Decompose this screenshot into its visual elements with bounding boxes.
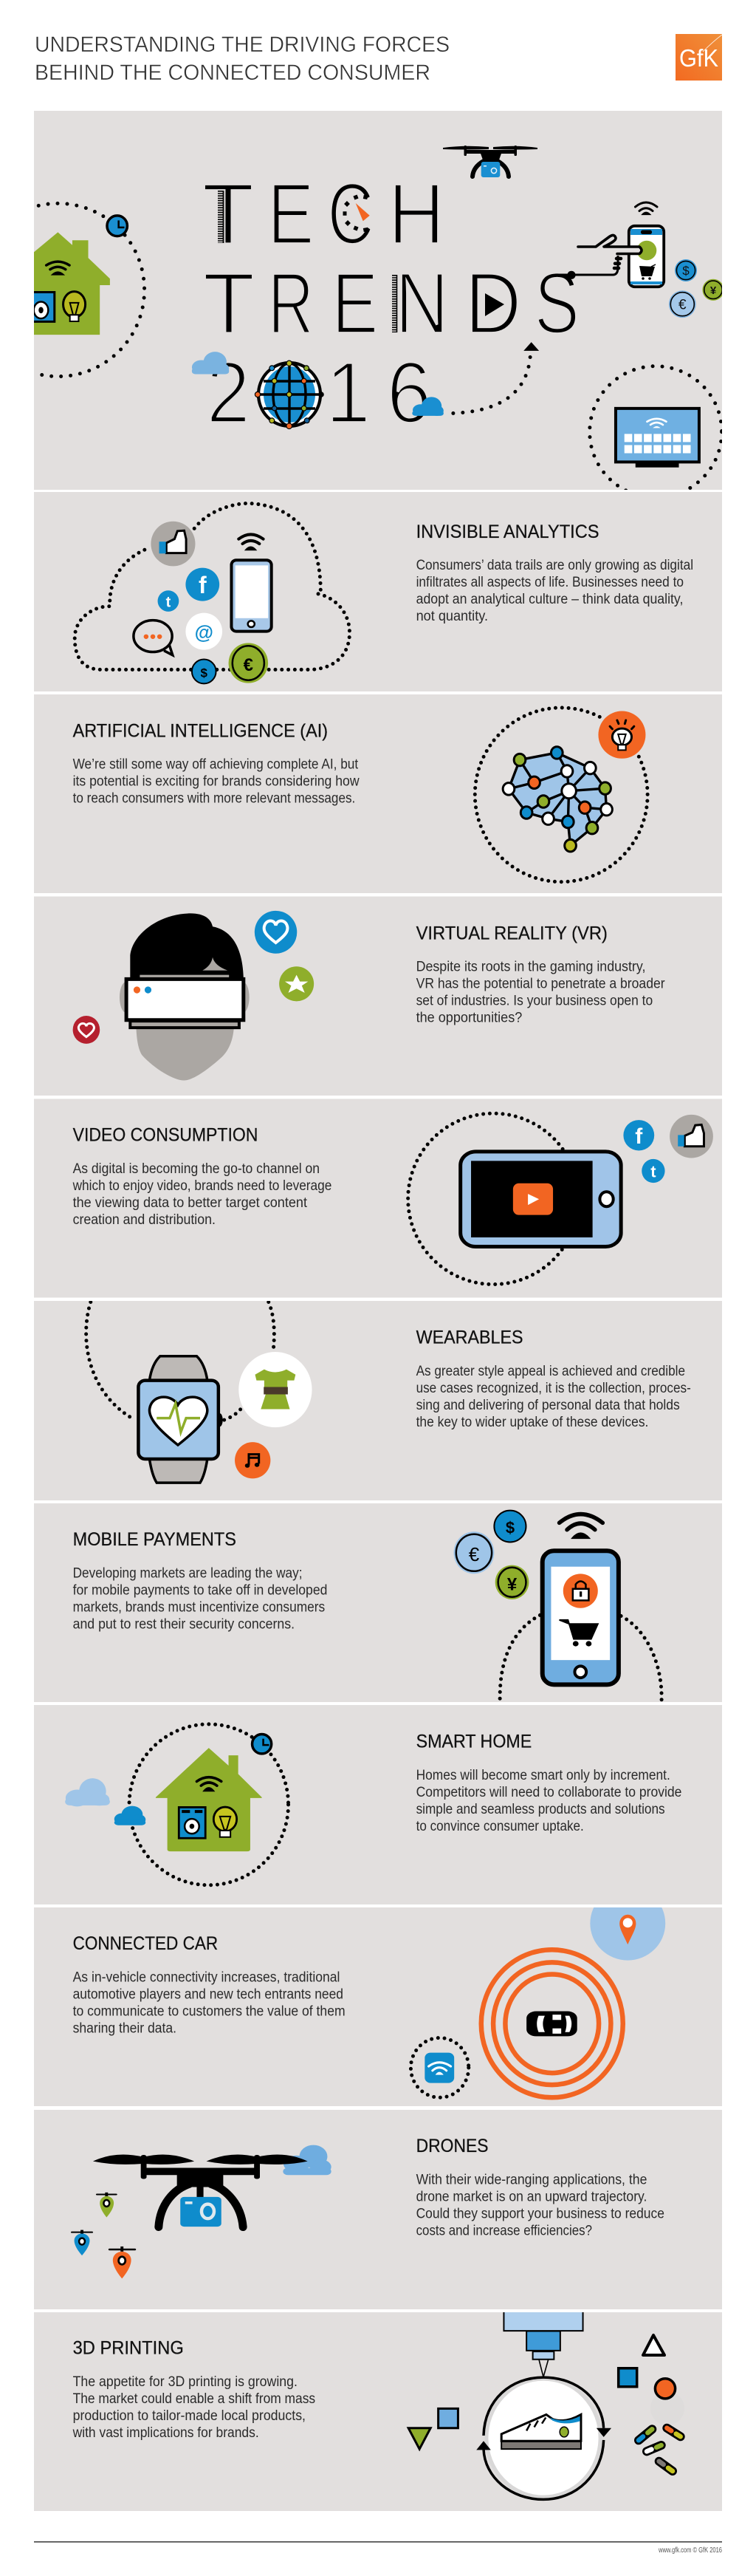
dotted orbit (475, 708, 647, 882)
icon: dollar coin: $ (682, 264, 690, 278)
icon: tumblr: t (650, 1163, 656, 1181)
icon: smart home (29, 232, 110, 335)
logo: GfK (676, 34, 722, 81)
icon: tumblr (158, 590, 179, 612)
body text: set of industries. Is your business open to (416, 993, 653, 1008)
icon: dial in C (343, 195, 370, 232)
icon: green house (156, 1748, 262, 1851)
illustration: 3D printer (408, 2309, 684, 2499)
heading: SMART HOME (416, 1732, 532, 1752)
icon: shopping cart (560, 1620, 598, 1647)
icon: facebook: f (199, 572, 207, 598)
icon: blue square (619, 2368, 637, 2387)
panel: 3D printing (34, 2309, 722, 2511)
icon: at sign: @ (195, 621, 213, 643)
icon: sneaker (501, 2414, 581, 2449)
logo: GfK: GfK (679, 44, 718, 72)
body text: We’re still some way off achieving complete AI, but (73, 756, 359, 772)
icon: tumblr (642, 1159, 665, 1183)
body text: The market could enable a shift from mass (73, 2391, 315, 2407)
body text (416, 558, 693, 624)
icon: euro coin (229, 643, 268, 683)
title: Tech Trends 2016: E (267, 165, 314, 263)
illustration: connected car (410, 1887, 665, 2097)
icon: drone (443, 146, 537, 177)
illustration: data cloud (75, 503, 349, 683)
icon: star (279, 966, 314, 1001)
icon: dollar coin (675, 259, 697, 281)
body text (416, 2172, 664, 2238)
icon: euro coin (454, 1531, 494, 1574)
dotted cloud outline (75, 503, 349, 669)
icon: chat bubble (134, 621, 173, 655)
title: Tech Trends 2016: 6 (387, 344, 432, 442)
body text: to convince consumer uptake. (416, 1819, 584, 1834)
icon: yen coin (702, 279, 724, 301)
body text: Developing markets are leading the way; (73, 1566, 302, 1582)
body text (73, 1969, 346, 2036)
icon: play symbol in D (485, 293, 504, 316)
icon: euro coin: € (469, 1543, 480, 1565)
icon: facebook (185, 568, 219, 601)
body text: With their wide-ranging applications, the (416, 2172, 647, 2187)
icon: mini blue drone (71, 2230, 93, 2255)
heading: ARTIFICIAL INTELLIGENCE (AI) (73, 721, 328, 742)
icon: dollar coin: $ (506, 1519, 515, 1537)
heading: CONNECTED CAR (73, 1933, 218, 1954)
icon: dress (238, 1352, 312, 1427)
body text: to communicate to customers the value of them (73, 2003, 346, 2020)
icon: facebook (623, 1120, 654, 1150)
body text: the viewing data to better target content (73, 1195, 308, 1211)
body text: As in-vehicle connectivity increases, traditional (73, 1969, 340, 1986)
heading: VIRTUAL REALITY (VR) (416, 923, 608, 943)
dotted orbit (86, 1302, 274, 1420)
title: Tech Trends 2016: S (535, 255, 580, 352)
title: Tech Trends 2016: H (388, 165, 444, 263)
body text: As greater style appeal is achieved and credible (416, 1364, 685, 1379)
body text: automotive players and new tech entrants need (73, 1987, 343, 2002)
icon: print cycle (476, 2377, 611, 2499)
icon: padlock (563, 1574, 598, 1608)
heading: DRONES (416, 2136, 489, 2156)
body text (73, 1566, 327, 1633)
icon: yen coin: ¥ (710, 284, 717, 297)
title: Tech Trends 2016: E (331, 255, 378, 352)
header title (35, 33, 450, 85)
illustration: smartwatch (86, 1302, 312, 1483)
icon: euro coin (669, 290, 696, 318)
footer rule (34, 2541, 722, 2543)
icon: globe (255, 361, 323, 428)
icon: music note (235, 1442, 270, 1478)
body text: to reach consumers with more relevant messages. (73, 790, 355, 806)
icon: phone (231, 560, 272, 632)
dotted orbit (408, 1113, 563, 1285)
icon: orange bulb (598, 711, 645, 759)
title: Tech Trends 2016: 1 (326, 344, 371, 442)
decoration: ruler ticks on N (394, 275, 397, 332)
icon: light cloud (192, 352, 229, 375)
icon: tumblr: t (166, 594, 171, 610)
dotted arcs (500, 1615, 662, 1702)
body text: and put to rest their security concerns. (73, 1617, 295, 1633)
title: Tech Trends 2016 (202, 165, 580, 442)
icon: red heart (73, 1016, 100, 1044)
icon: blue heart (255, 911, 297, 954)
body text: VR has the potential to penetrate a broader (416, 976, 665, 991)
dotted orbit (129, 1724, 289, 1885)
body text: As digital is becoming the go-to channel on (73, 1161, 320, 1177)
title: Tech Trends 2016: 2 (207, 344, 250, 442)
icon: main drone (93, 2154, 308, 2227)
body text (416, 1768, 681, 1834)
body text: The appetite for 3D printing is growing. (73, 2374, 298, 2390)
icon: orange circle (655, 2379, 676, 2399)
icon: mini orange drone (109, 2247, 136, 2278)
illustration: VR headset person (73, 911, 314, 1080)
icon: capsules (639, 2428, 681, 2471)
heading: VIDEO CONSUMPTION (73, 1124, 258, 1145)
decoration: ruler ticks on T (221, 191, 223, 243)
panel: connected car (34, 1887, 722, 2106)
body text (416, 959, 665, 1025)
icon: dotted circle around tablet (590, 366, 722, 497)
icon: clock (107, 216, 127, 236)
body text: drone market is on an upward trajectory. (416, 2189, 647, 2204)
icon: like (670, 1115, 713, 1158)
body text: Competitors will need to collaborate to provide (416, 1785, 681, 1800)
body text: creation and distribution. (73, 1212, 216, 1228)
illustration: video tablet (408, 1113, 713, 1285)
heading: 3D PRINTING (73, 2337, 184, 2358)
icon: green triangle (408, 2428, 430, 2449)
body text: costs and increase efficiencies? (416, 2223, 592, 2238)
panel: mobile payments (34, 1503, 722, 1702)
body text: the key to wider uptake of these devices. (416, 1415, 648, 1430)
title: Tech Trends 2016: D (465, 255, 521, 352)
signal rings (481, 1950, 623, 2097)
body text: not quantity. (416, 609, 488, 624)
title: Tech Trends 2016: T (202, 165, 254, 263)
panel: hero Tech Trends 2016 (29, 111, 724, 497)
heading: INVISIBLE ANALYTICS (416, 522, 599, 542)
panel: drones (34, 2110, 722, 2309)
icon: clock (252, 1734, 272, 1754)
icon: phone (543, 1551, 619, 1684)
body text: the opportunities? (416, 1010, 522, 1025)
heading: WEARABLES (416, 1328, 523, 1348)
icon: dollar coin (192, 659, 216, 683)
body text (72, 1161, 331, 1228)
icon: phone wifi (635, 202, 657, 214)
body text: simple and seamless products and solutions (416, 1802, 665, 1817)
icon: mini green drone (96, 2193, 117, 2218)
icon: cloud (283, 2145, 331, 2175)
icon: tablet screen (616, 409, 699, 468)
footer credit: www.gfk.com © GfK 2016 (658, 2546, 722, 2555)
icon: like (151, 522, 195, 566)
icon: euro coin: € (244, 655, 253, 675)
icon: hand and phone (557, 226, 664, 287)
icon: wifi (238, 534, 264, 550)
body text: Homes will become smart only by increment. (416, 1768, 670, 1783)
icon: location pin (590, 1907, 666, 1961)
dotted orbit around home (38, 203, 145, 377)
body text: with vast implications for brands. (72, 2425, 259, 2441)
title: Tech Trends 2016: R (268, 255, 314, 352)
body text: production to tailor-made local products, (73, 2408, 306, 2424)
icon: dollar coin (494, 1511, 526, 1542)
icon: yen coin: ¥ (507, 1574, 518, 1594)
header title: UNDERSTANDING THE DRIVING FORCES (35, 33, 450, 57)
icon: yen coin (495, 1565, 529, 1599)
icon: wifi badge (410, 2038, 469, 2097)
icon: blue cloud (114, 1806, 145, 1825)
icon: printer head (504, 2309, 583, 2377)
panel: artificial intelligence (34, 694, 722, 893)
body text: which to enjoy video, brands need to leverage (72, 1178, 331, 1194)
icon: watch (138, 1356, 223, 1483)
illustration: smart home (65, 1724, 289, 1885)
body text (416, 1364, 691, 1430)
body text: Could they support your business to reduce (416, 2206, 664, 2221)
title: Tech Trends 2016: N (395, 255, 449, 352)
arrow: dotted up arrow (453, 342, 539, 413)
hero illustrations (29, 146, 724, 497)
icon: tablet (461, 1152, 621, 1246)
icon: dollar coin: $ (201, 666, 208, 680)
icon: wifi (560, 1514, 602, 1538)
panel: virtual reality (34, 897, 722, 1096)
body text (72, 2374, 315, 2441)
icon: white triangle (643, 2335, 664, 2355)
title: Tech Trends 2016: 0 (268, 344, 312, 442)
panel: wearables (34, 1301, 722, 1500)
illustration: AI brain (475, 708, 647, 882)
body text: markets, brands must incentivize consumers (73, 1600, 325, 1616)
head with hair (120, 913, 250, 1080)
icon: facebook: f (635, 1124, 643, 1149)
heading: MOBILE PAYMENTS (73, 1529, 236, 1550)
body text: adopt an analytical culture – think data quality, (416, 592, 683, 607)
body text: its potential is exciting for brands considering how (73, 773, 360, 789)
icon: at sign (185, 613, 222, 650)
title: Tech Trends 2016: C (328, 165, 374, 263)
icon: brain network (503, 747, 612, 852)
body text: sing and delivering of personal data that holds (416, 1398, 680, 1413)
VR headset (126, 979, 244, 1028)
icon: light blue square (439, 2408, 458, 2428)
body text: for mobile payments to take off in developed (73, 1583, 327, 1599)
panel: video consumption (34, 1099, 722, 1297)
icon: blue cloud (412, 397, 444, 416)
body text: infiltrates all aspects of life. Businesses need to (416, 575, 684, 590)
icon: light cloud (65, 1778, 110, 1806)
illustration: drones (71, 2145, 331, 2278)
panel: invisible analytics (34, 492, 722, 691)
body text: use cases recognized, it is the collection, proces- (416, 1381, 691, 1396)
icon: faint circle (650, 2391, 684, 2425)
icon: euro coin: € (678, 297, 687, 313)
body text: Despite its roots in the gaming industry, (416, 959, 645, 974)
icon: car (526, 2011, 577, 2036)
body text: Consumers’ data trails are only growing as digital (416, 558, 693, 573)
title: Tech Trends 2016: T (202, 255, 255, 352)
body text (73, 756, 360, 806)
body text: sharing their data. (73, 2021, 176, 2036)
illustration: mobile payment phone (454, 1511, 662, 1702)
header title: BEHIND THE CONNECTED CONSUMER (35, 61, 430, 85)
panel: smart home (34, 1705, 722, 1904)
